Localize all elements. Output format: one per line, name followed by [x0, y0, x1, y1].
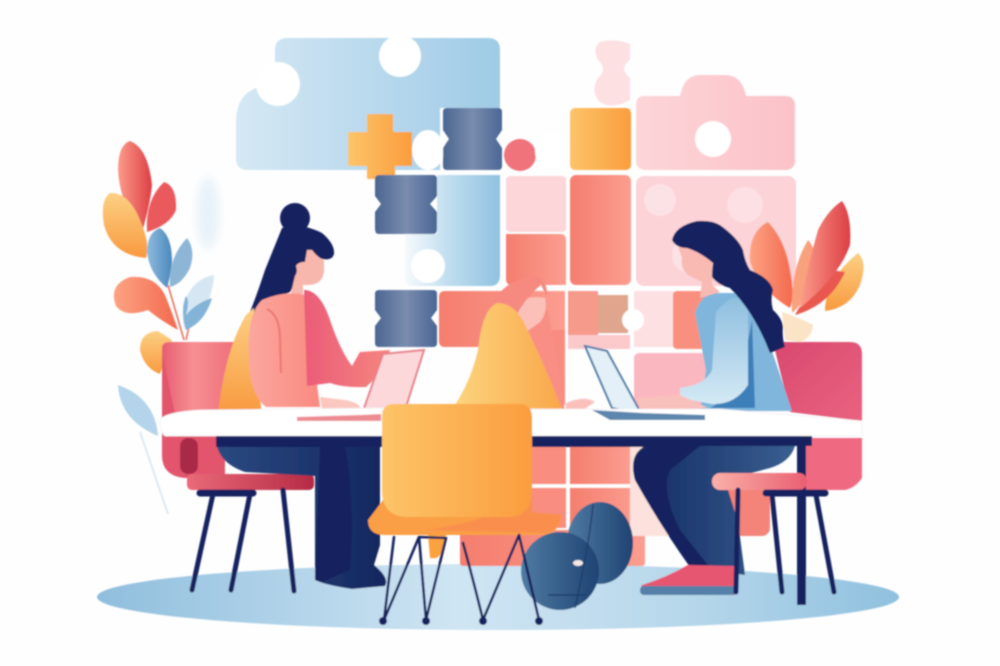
puzzle piece: slate lower	[375, 290, 437, 347]
leaf: blue right	[170, 238, 192, 287]
leaf: pale blue	[183, 275, 214, 330]
hand	[320, 397, 360, 411]
leaf: red small	[147, 182, 176, 232]
laptop screen	[361, 350, 424, 417]
puzzle piece: salmon base under table	[460, 446, 770, 566]
dot: white blob 2	[535, 133, 569, 171]
right plant	[750, 201, 864, 342]
leaf: middle	[792, 240, 815, 313]
hand	[565, 399, 595, 413]
dot: white blob	[412, 130, 444, 170]
legs	[736, 490, 834, 592]
dot: white blob 3	[411, 249, 445, 283]
puzzle piece: salmon row	[439, 291, 630, 405]
puzzle piece: orange cross	[349, 115, 411, 178]
person: right woman	[585, 221, 795, 595]
face	[513, 297, 546, 335]
puzzle piece: slate top	[443, 108, 502, 170]
seat	[368, 487, 562, 535]
puzzle piece: slate middle	[375, 175, 437, 234]
person: middle woman	[450, 277, 595, 413]
floor ellipse	[97, 564, 899, 630]
leaf: blue sprig	[183, 296, 212, 330]
seat	[187, 474, 314, 490]
table underside	[216, 436, 812, 447]
hand	[637, 395, 708, 408]
chair: orange front	[368, 404, 562, 625]
puzzle piece: orange right	[570, 108, 631, 170]
table top	[160, 408, 862, 436]
dot: red circle	[504, 139, 536, 171]
puzzle piece: blue lower	[405, 175, 500, 286]
leaf: orange low	[140, 331, 172, 374]
puzzle piece: salmon tall tile	[570, 175, 631, 285]
puzzle piece: pale tile	[634, 291, 674, 347]
face	[678, 247, 720, 298]
hair	[494, 277, 547, 318]
seat drop	[428, 535, 446, 558]
seat	[712, 473, 807, 490]
puzzle wall	[236, 35, 796, 566]
wire legs	[384, 535, 539, 620]
legs	[192, 490, 294, 591]
torso	[695, 293, 792, 411]
pants	[633, 446, 795, 575]
shoes	[641, 565, 735, 595]
leaf: lower left pale blue	[118, 385, 158, 436]
leaf: blue big	[147, 228, 172, 288]
stems	[168, 285, 191, 340]
leaf: red tall	[800, 201, 850, 308]
dot: white joint	[622, 309, 644, 331]
puzzle piece: pink camera	[636, 75, 795, 170]
yellow jacket back	[218, 308, 262, 414]
yellow body	[450, 303, 563, 412]
puzzle piece: pink and salmon tile	[506, 176, 566, 285]
puzzle piece: pink lower tile	[634, 353, 709, 411]
leaf: red tall	[118, 141, 152, 232]
pants	[216, 438, 386, 589]
face	[290, 250, 324, 297]
leaf: yellow	[103, 193, 147, 258]
arm	[680, 298, 748, 404]
laptop base: right	[592, 410, 705, 420]
chair: right booth	[773, 342, 862, 490]
leaf: orange left	[750, 222, 792, 308]
hair	[672, 221, 785, 353]
right stool	[712, 473, 834, 592]
puzzle piece: pink top sliver	[594, 40, 630, 106]
leaf: right pale base	[782, 312, 813, 342]
red sleeve	[304, 290, 390, 387]
puzzle piece: salmon small	[673, 291, 705, 349]
left plant	[103, 141, 214, 514]
lower leg shade	[315, 446, 352, 582]
shoulders	[510, 310, 565, 412]
laptop screen	[585, 346, 642, 415]
chair: left booth	[162, 342, 314, 591]
balls	[521, 502, 633, 610]
laptop base: left	[297, 414, 381, 421]
ghost shape	[197, 177, 219, 249]
leaf: coral	[114, 277, 178, 330]
person: left woman	[216, 203, 424, 589]
peach sleeve	[249, 293, 320, 407]
back	[382, 404, 532, 517]
leaf: orange right	[825, 253, 864, 311]
puzzle piece: pink middle grid	[636, 176, 796, 286]
right table leg	[797, 440, 806, 605]
leaf: red mid	[795, 270, 845, 315]
hair bun	[280, 203, 310, 233]
hair	[238, 226, 334, 340]
puzzle piece: large blue top	[236, 35, 500, 170]
